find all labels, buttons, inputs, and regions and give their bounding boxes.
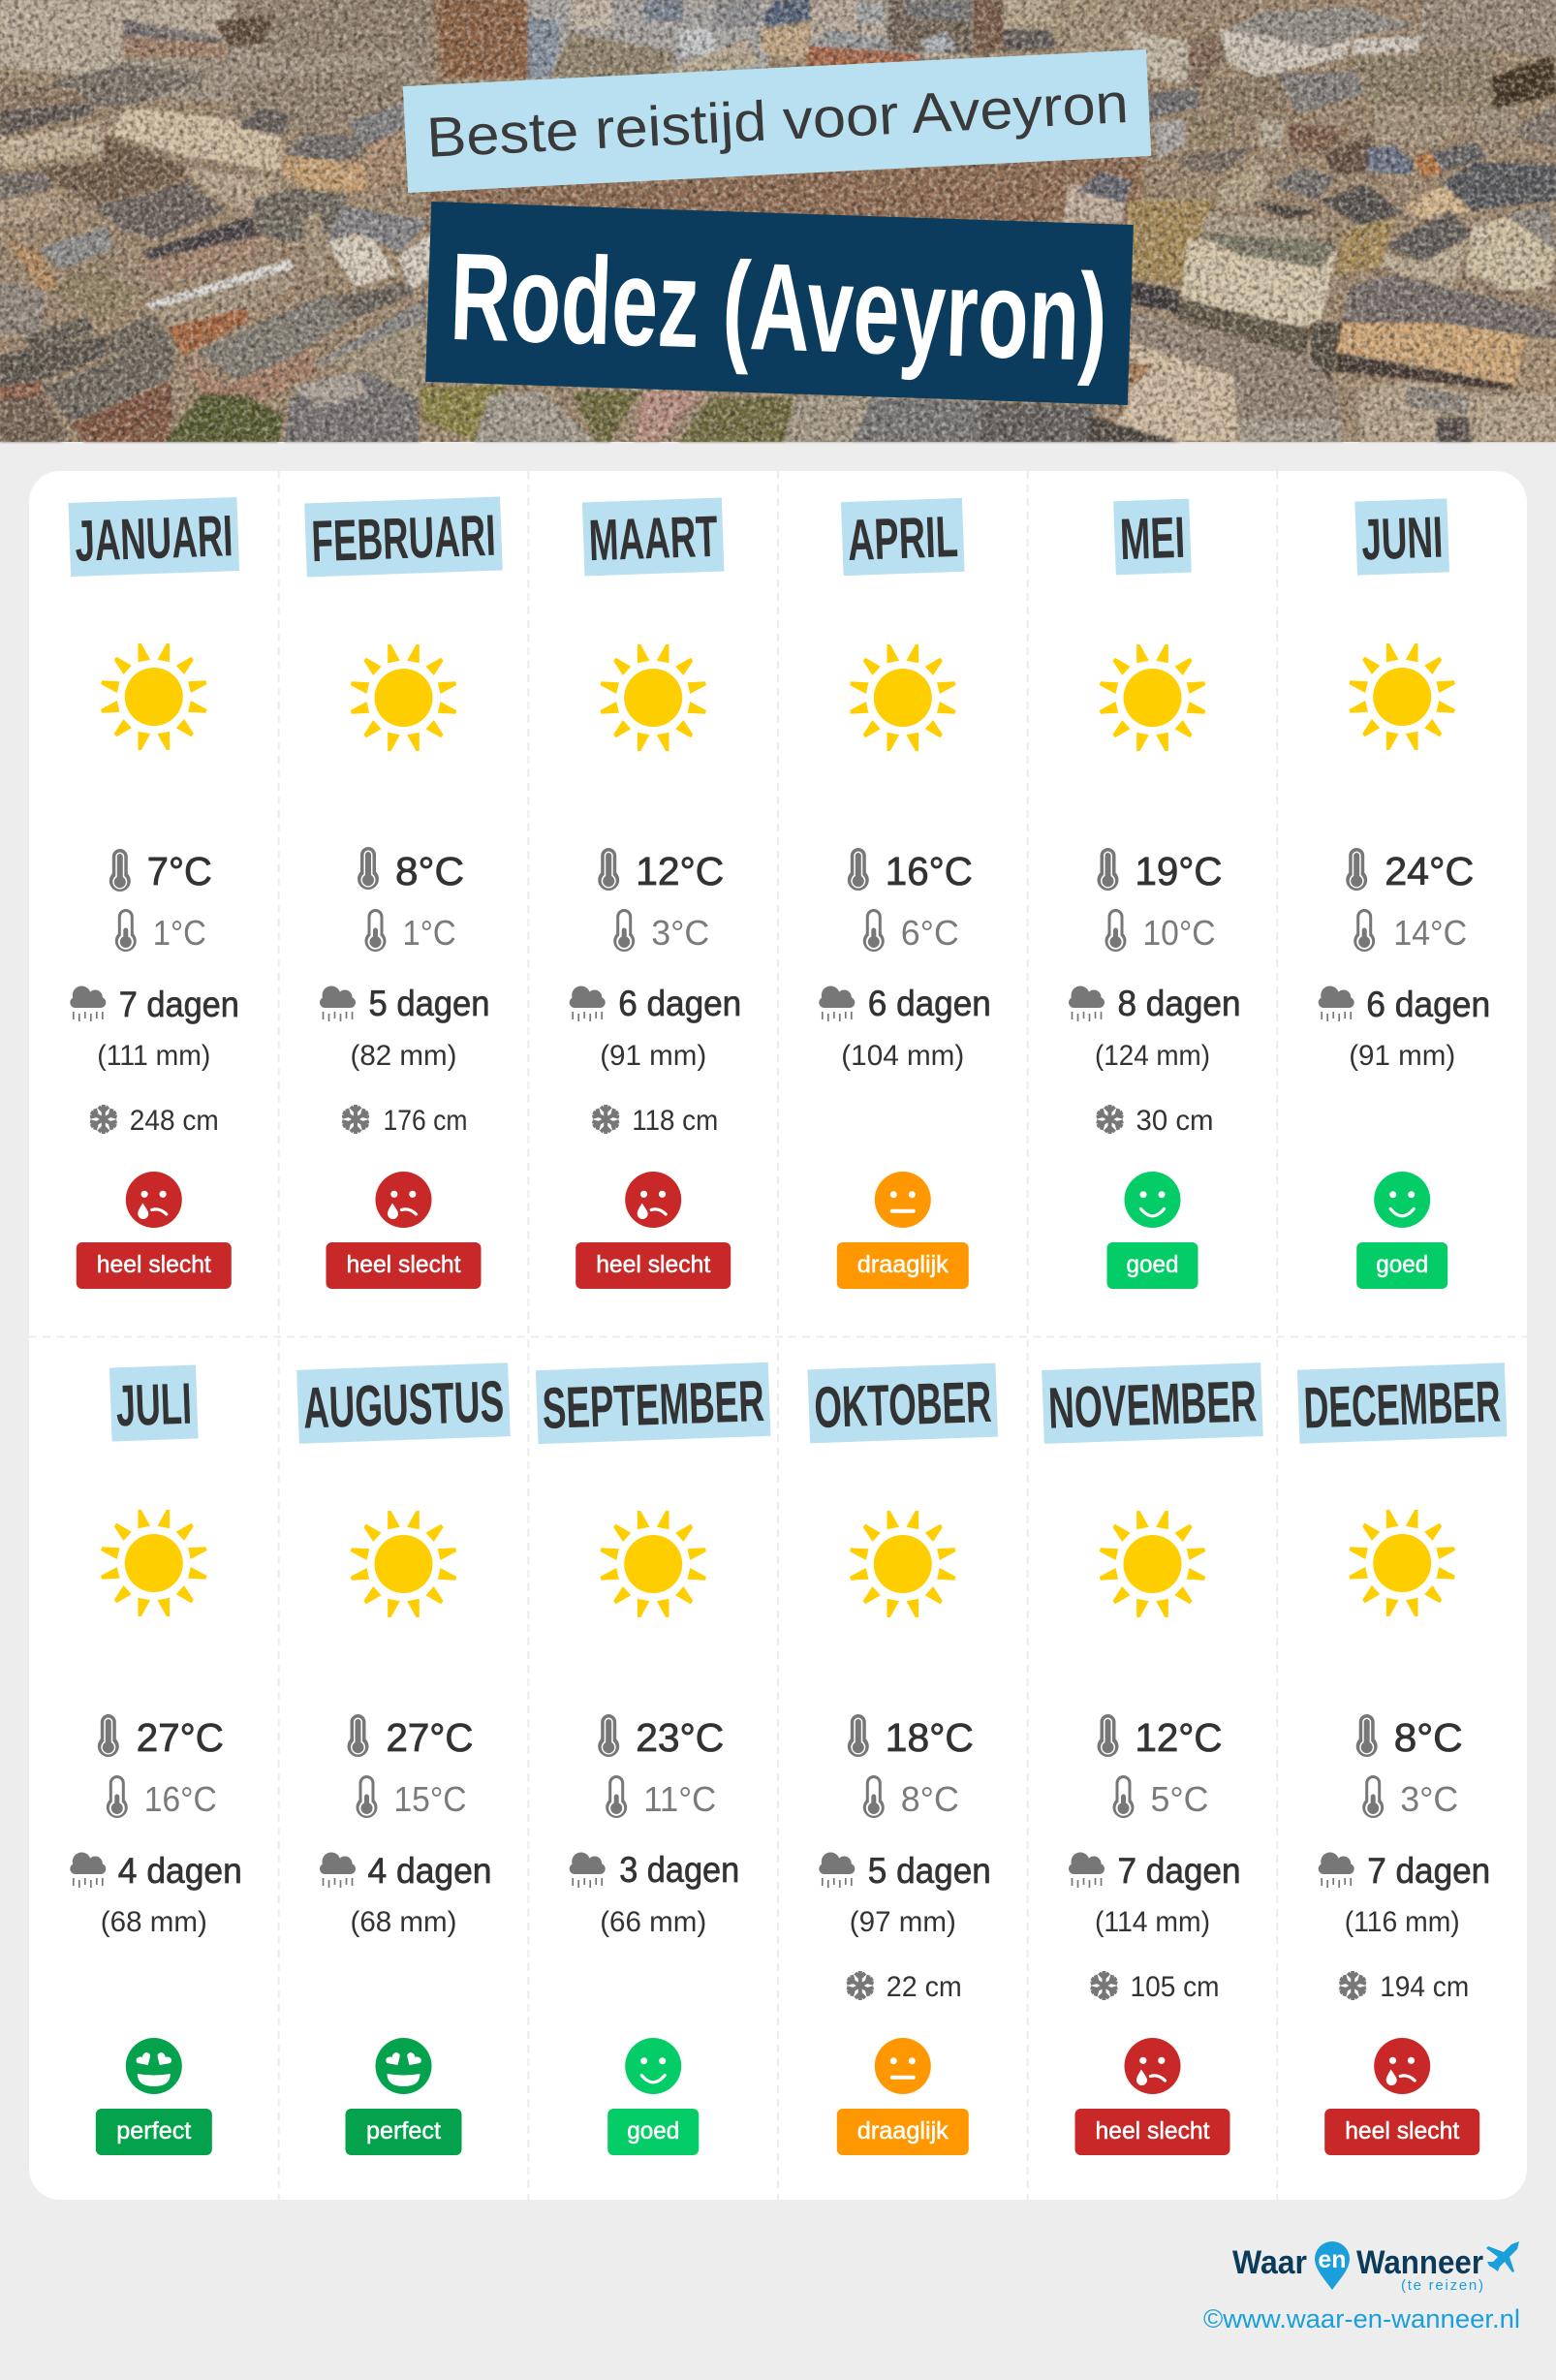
snow: 194 cm <box>1380 1971 1469 2003</box>
icon: sun <box>601 644 706 751</box>
low temperature: 1°C <box>153 913 206 953</box>
rating <box>1106 1242 1198 1289</box>
snow <box>845 1971 962 2003</box>
tagline: (te reizen) <box>1401 2277 1483 2294</box>
rating: perfect <box>366 2117 441 2145</box>
label: juli <box>109 1364 199 1442</box>
high temperature: 8°C <box>1394 1715 1463 1760</box>
rating: goed <box>1126 1251 1178 1278</box>
high temperature: 7°C <box>147 849 212 893</box>
label: augustus: AUGUSTUS <box>302 1368 505 1441</box>
high temperature: 18°C <box>886 1715 974 1760</box>
month: november <box>1042 1362 1263 2155</box>
label: juni <box>1354 498 1449 576</box>
snow <box>591 1105 718 1137</box>
rating: perfect <box>116 2117 191 2145</box>
label: maart: MAART <box>588 504 719 573</box>
label: januari <box>68 497 239 577</box>
rainfall: (91 mm) <box>600 1040 706 1072</box>
snow <box>1338 1971 1469 2003</box>
icon: sun <box>101 643 207 750</box>
month: april <box>819 498 991 1289</box>
subtitle banner <box>403 49 1151 193</box>
label: februari: FEBRUARI <box>310 503 497 574</box>
icon: airplane <box>1486 2241 1519 2272</box>
rainfall: (68 mm) <box>101 1906 207 1938</box>
rating <box>345 2109 461 2155</box>
rating: goed <box>627 2117 679 2145</box>
label: februari <box>304 496 503 578</box>
high temperature <box>1346 848 1474 893</box>
rating <box>77 1242 232 1289</box>
label: september <box>536 1362 770 1444</box>
rating <box>96 2109 212 2155</box>
rain days <box>819 984 991 1023</box>
rating: heel slecht <box>97 1251 211 1278</box>
high temperature <box>1097 1714 1223 1760</box>
low temperature <box>1354 909 1467 953</box>
snow: 118 cm <box>632 1105 718 1137</box>
high temperature: 24°C <box>1385 849 1474 893</box>
rainfall: (124 mm) <box>1095 1040 1210 1072</box>
panel: climate card <box>29 471 1527 2200</box>
rating: heel slecht <box>1345 2117 1459 2145</box>
wordmark: en: en <box>1318 2246 1347 2273</box>
high temperature: 27°C <box>137 1715 224 1760</box>
month: maart <box>570 498 741 1289</box>
rain days: 8 dagen <box>1118 984 1240 1023</box>
rainfall: (91 mm) <box>1349 1040 1455 1072</box>
rainfall: (68 mm) <box>351 1906 457 1938</box>
low temperature <box>606 1775 716 1819</box>
high temperature <box>598 1714 724 1760</box>
rain days: 4 dagen <box>368 1851 492 1891</box>
rating <box>837 1242 969 1289</box>
row: months July to December <box>70 1362 1507 2155</box>
rating <box>607 2109 699 2155</box>
high temperature: 19°C <box>1136 849 1223 893</box>
face <box>1124 2038 1180 2094</box>
rain days: 7 dagen <box>1118 1851 1240 1891</box>
row: months January to June <box>68 496 1490 1289</box>
rating <box>576 1242 731 1289</box>
label: oktober: OKTOBER <box>813 1369 992 1440</box>
high temperature <box>358 847 464 893</box>
rain days: 6 dagen <box>1366 985 1490 1024</box>
high temperature: 16°C <box>886 849 973 893</box>
rain days <box>1319 1851 1490 1891</box>
snow: 30 cm <box>1136 1105 1213 1137</box>
label: april: APRIL <box>847 504 959 573</box>
low temperature <box>613 909 709 953</box>
rainfall: (97 mm) <box>850 1906 956 1938</box>
icon: sun <box>1100 1511 1205 1617</box>
rating <box>837 2109 969 2155</box>
rainfall: (116 mm) <box>1345 1906 1460 1938</box>
snow <box>1095 1105 1213 1137</box>
low temperature <box>364 909 455 953</box>
icon: sun <box>101 1510 207 1616</box>
rating: draaglijk <box>857 1251 949 1278</box>
rain days: 5 dagen <box>868 1851 991 1891</box>
rainfall: (82 mm) <box>351 1040 457 1072</box>
face <box>1374 1172 1430 1228</box>
wordmark: Waar: Waar <box>1232 2244 1307 2281</box>
rainfall: (66 mm) <box>600 1906 706 1938</box>
low temperature: 15°C <box>393 1779 467 1819</box>
label: oktober <box>807 1363 998 1443</box>
face <box>376 2038 432 2094</box>
face <box>625 2038 681 2094</box>
face <box>875 1172 931 1228</box>
icon: sun <box>351 1511 456 1617</box>
face <box>875 2038 931 2094</box>
label: juni: JUNI <box>1360 505 1444 572</box>
month: augustus <box>296 1362 511 2155</box>
rating: heel slecht <box>347 1251 461 1278</box>
snow <box>88 1105 219 1137</box>
title banner: Rodez (Aveyron) <box>449 228 1109 388</box>
high temperature <box>848 848 973 893</box>
rating <box>1356 1242 1447 1289</box>
rating <box>326 1242 481 1289</box>
label: november <box>1042 1362 1263 1444</box>
rating: heel slecht <box>596 1251 710 1278</box>
low temperature: 5°C <box>1151 1779 1209 1819</box>
rain days: 6 dagen <box>868 984 991 1023</box>
rating: heel slecht <box>1095 2117 1210 2145</box>
face <box>625 1172 681 1228</box>
label: januari: JANUARI <box>74 503 233 574</box>
icon: sun <box>351 644 456 751</box>
icon: sun <box>850 644 955 751</box>
low temperature: 11°C <box>643 1779 716 1819</box>
rain days <box>320 984 490 1023</box>
rain days: 6 dagen <box>618 984 741 1023</box>
rain days <box>320 1851 492 1891</box>
month: februari <box>304 496 503 1289</box>
low temperature <box>863 909 959 953</box>
icon: sun <box>601 1511 706 1617</box>
high temperature <box>848 1714 974 1760</box>
label: september: SEPTEMBER <box>542 1368 765 1441</box>
low temperature <box>357 1775 467 1819</box>
face <box>126 1172 182 1228</box>
low temperature <box>1362 1775 1458 1819</box>
high temperature <box>1356 1714 1463 1760</box>
rain days: 3 dagen <box>619 1850 739 1890</box>
high temperature <box>1097 848 1223 893</box>
high temperature: 23°C <box>636 1715 724 1760</box>
face <box>1124 1172 1180 1228</box>
rating: goed <box>1376 1251 1428 1278</box>
rain days: 7 dagen <box>119 985 239 1024</box>
high temperature <box>109 849 212 893</box>
rain days <box>1069 984 1240 1023</box>
rating: draaglijk <box>857 2117 949 2145</box>
low temperature <box>863 1775 959 1819</box>
icon: sun <box>1100 644 1205 751</box>
rain days <box>570 984 741 1023</box>
label: augustus <box>296 1362 511 1444</box>
snow: 176 cm <box>384 1105 467 1137</box>
rain days <box>1069 1851 1240 1891</box>
rain days <box>70 1851 242 1891</box>
rain days: 7 dagen <box>1367 1851 1490 1891</box>
low temperature: 14°C <box>1393 913 1467 953</box>
month: juli <box>70 1364 242 2155</box>
face <box>1374 2038 1430 2094</box>
low temperature <box>107 1775 217 1819</box>
high temperature <box>347 1714 473 1760</box>
low temperature: 3°C <box>1400 1779 1458 1819</box>
icon: sun <box>1349 643 1455 750</box>
label: november: NOVEMBER <box>1047 1368 1258 1441</box>
month: mei <box>1069 499 1240 1289</box>
low temperature: 10°C <box>1143 913 1215 953</box>
high temperature: 8°C <box>395 849 464 893</box>
icon: sun <box>1349 1510 1455 1616</box>
high temperature <box>98 1714 224 1760</box>
snow: 248 cm <box>130 1105 219 1137</box>
hero photo: aerial view of Rodez <box>0 0 1556 442</box>
low temperature: 1°C <box>403 913 455 953</box>
high temperature: 12°C <box>636 849 724 893</box>
icon: map pin <box>1315 2241 1350 2290</box>
low temperature: 16°C <box>144 1779 217 1819</box>
icon: sun <box>850 1511 955 1617</box>
high temperature: 27°C <box>386 1715 473 1760</box>
rain days: 5 dagen <box>368 984 490 1023</box>
month: juni <box>1319 498 1490 1289</box>
label: mei <box>1113 499 1192 575</box>
snow <box>341 1105 467 1137</box>
rain days <box>1319 985 1490 1024</box>
title banner <box>425 202 1134 405</box>
month: december <box>1297 1362 1507 2155</box>
logo: Waar en Wanneer <box>1232 2241 1519 2294</box>
face <box>376 1172 432 1228</box>
rain days <box>570 1850 739 1890</box>
rating <box>1075 2109 1230 2155</box>
rain days: 4 dagen <box>118 1851 242 1891</box>
low temperature: 8°C <box>901 1779 959 1819</box>
subtitle banner: Beste reistijd voor Aveyron <box>425 72 1130 170</box>
snow: 22 cm <box>887 1971 962 2003</box>
low temperature <box>1105 909 1215 953</box>
wordmark: Wanneer: Wanneer <box>1356 2244 1483 2281</box>
high temperature: 12°C <box>1136 1715 1223 1760</box>
rating <box>1324 2109 1479 2155</box>
month: oktober <box>807 1363 998 2155</box>
snow <box>1089 1971 1219 2003</box>
rain days <box>819 1851 991 1891</box>
low temperature <box>115 909 206 953</box>
rainfall: (114 mm) <box>1095 1906 1210 1938</box>
snow: 105 cm <box>1130 1971 1219 2003</box>
low temperature <box>1112 1775 1209 1819</box>
low temperature: 6°C <box>901 913 959 953</box>
label: mei: MEI <box>1119 505 1186 572</box>
rain days <box>70 985 239 1024</box>
website link: ©www.waar-en-wanneer.nl <box>1203 2304 1520 2333</box>
label: juli: JULI <box>115 1371 193 1438</box>
face <box>126 2038 182 2094</box>
label: april <box>841 498 965 576</box>
low temperature: 3°C <box>651 913 709 953</box>
rainfall: (111 mm) <box>97 1040 210 1072</box>
rainfall: (104 mm) <box>841 1040 964 1072</box>
high temperature <box>598 848 724 893</box>
label: maart <box>582 498 724 576</box>
month: september <box>536 1362 770 2155</box>
month: januari <box>68 497 239 1289</box>
